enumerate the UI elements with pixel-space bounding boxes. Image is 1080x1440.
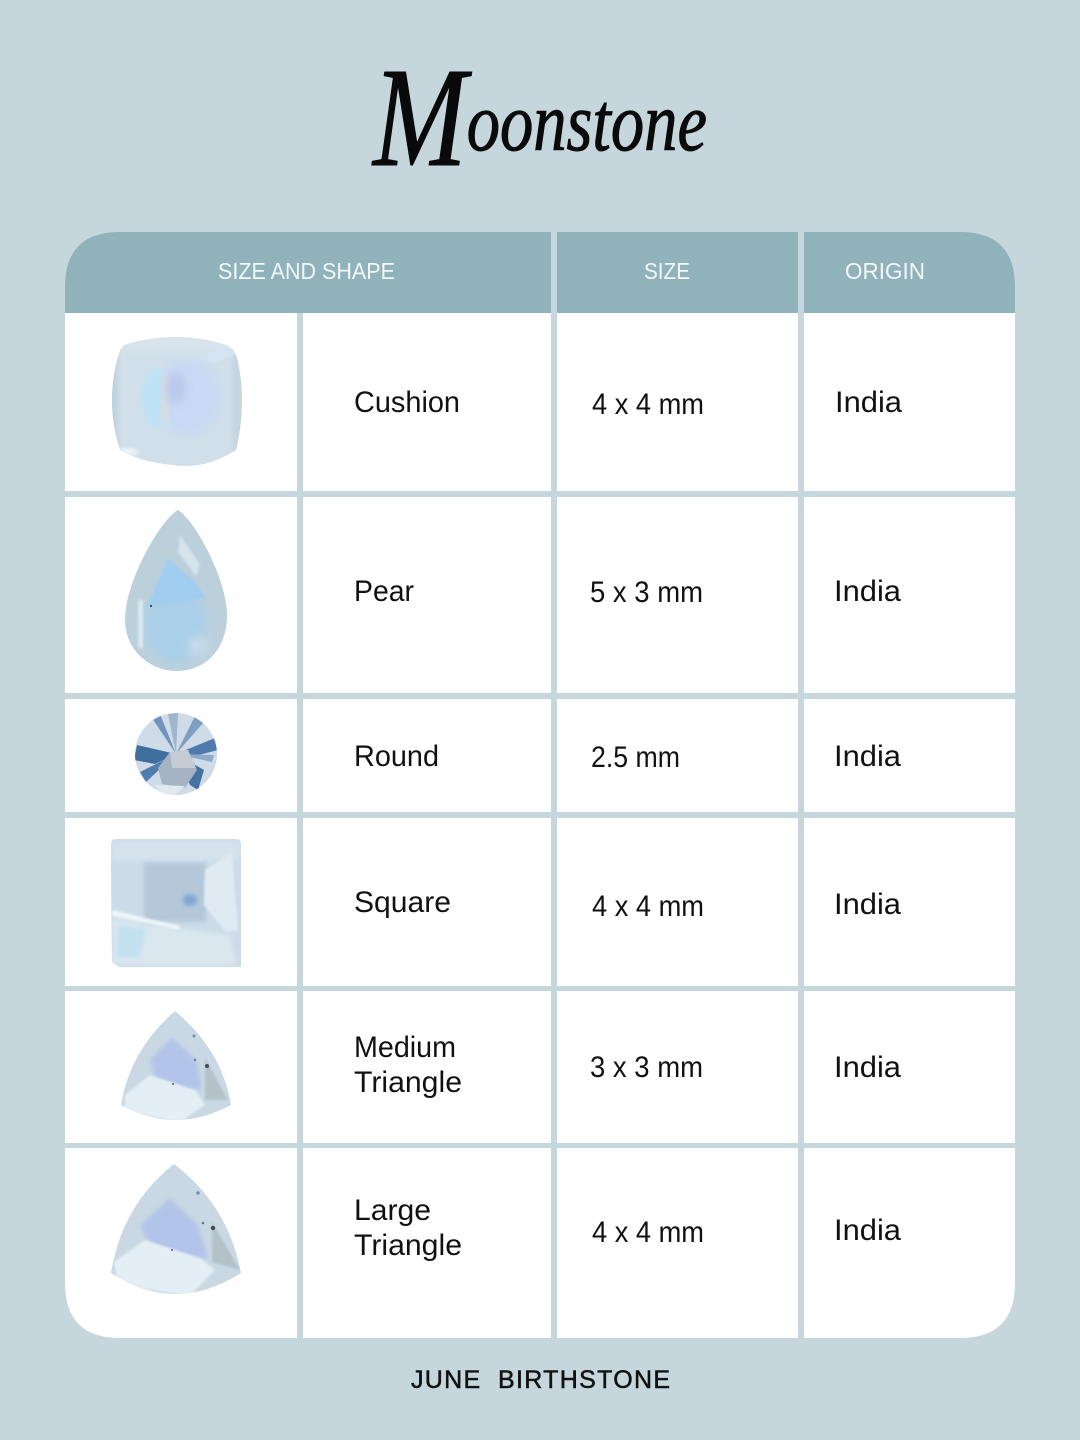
gem: cushion [112,337,242,466]
gem: square [108,836,244,970]
size: round: 2.5 mm [591,741,680,774]
label: round: Round [354,740,439,773]
header: size and shape: SIZE AND SHAPE [218,258,395,284]
label: medium triangle: Medium [354,1031,456,1064]
gem: medium triangle [121,1011,231,1120]
table header band [65,232,1015,313]
row: pear [120,505,901,675]
row: medium triangle [115,1008,901,1126]
size: pear: 5 x 3 mm [590,576,703,609]
origin: large triangle: India [834,1214,901,1247]
origin: round: India [834,740,901,773]
column and row dividers [65,232,1015,1338]
header: origin: ORIGIN [845,258,925,284]
origin: pear: India [834,575,901,608]
size: large triangle: 4 x 4 mm [592,1216,704,1249]
origin: square: India [834,888,901,921]
origin: cushion: India [835,386,902,419]
row: round [130,710,901,800]
gem: pear [125,510,227,671]
title: M [371,38,472,196]
header: size: SIZE [644,258,690,284]
label: large triangle: Large [354,1194,431,1227]
label: medium triangle: Triangle [354,1066,462,1099]
label: cushion: Cushion [354,386,460,419]
title: oonstone [467,76,707,169]
table body [65,313,1015,1338]
row: cushion [112,337,902,466]
table card [65,232,1015,1338]
size: medium triangle: 3 x 3 mm [590,1051,703,1084]
gem: round [135,713,217,795]
row: large triangle [105,1160,901,1300]
origin: medium triangle: India [834,1051,901,1084]
label: square: Square [354,886,451,919]
size: cushion: 4 x 4 mm [592,388,704,421]
label: medium triangle [354,1031,462,1099]
gem: large triangle [111,1164,241,1294]
label: large triangle: Triangle [354,1229,462,1262]
label: large triangle [354,1194,462,1262]
label: pear: Pear [354,575,414,608]
row: square [108,836,901,970]
title [371,38,707,196]
footer caption: JUNE BIRTHSTONE [411,1366,670,1394]
size: square: 4 x 4 mm [592,890,704,923]
